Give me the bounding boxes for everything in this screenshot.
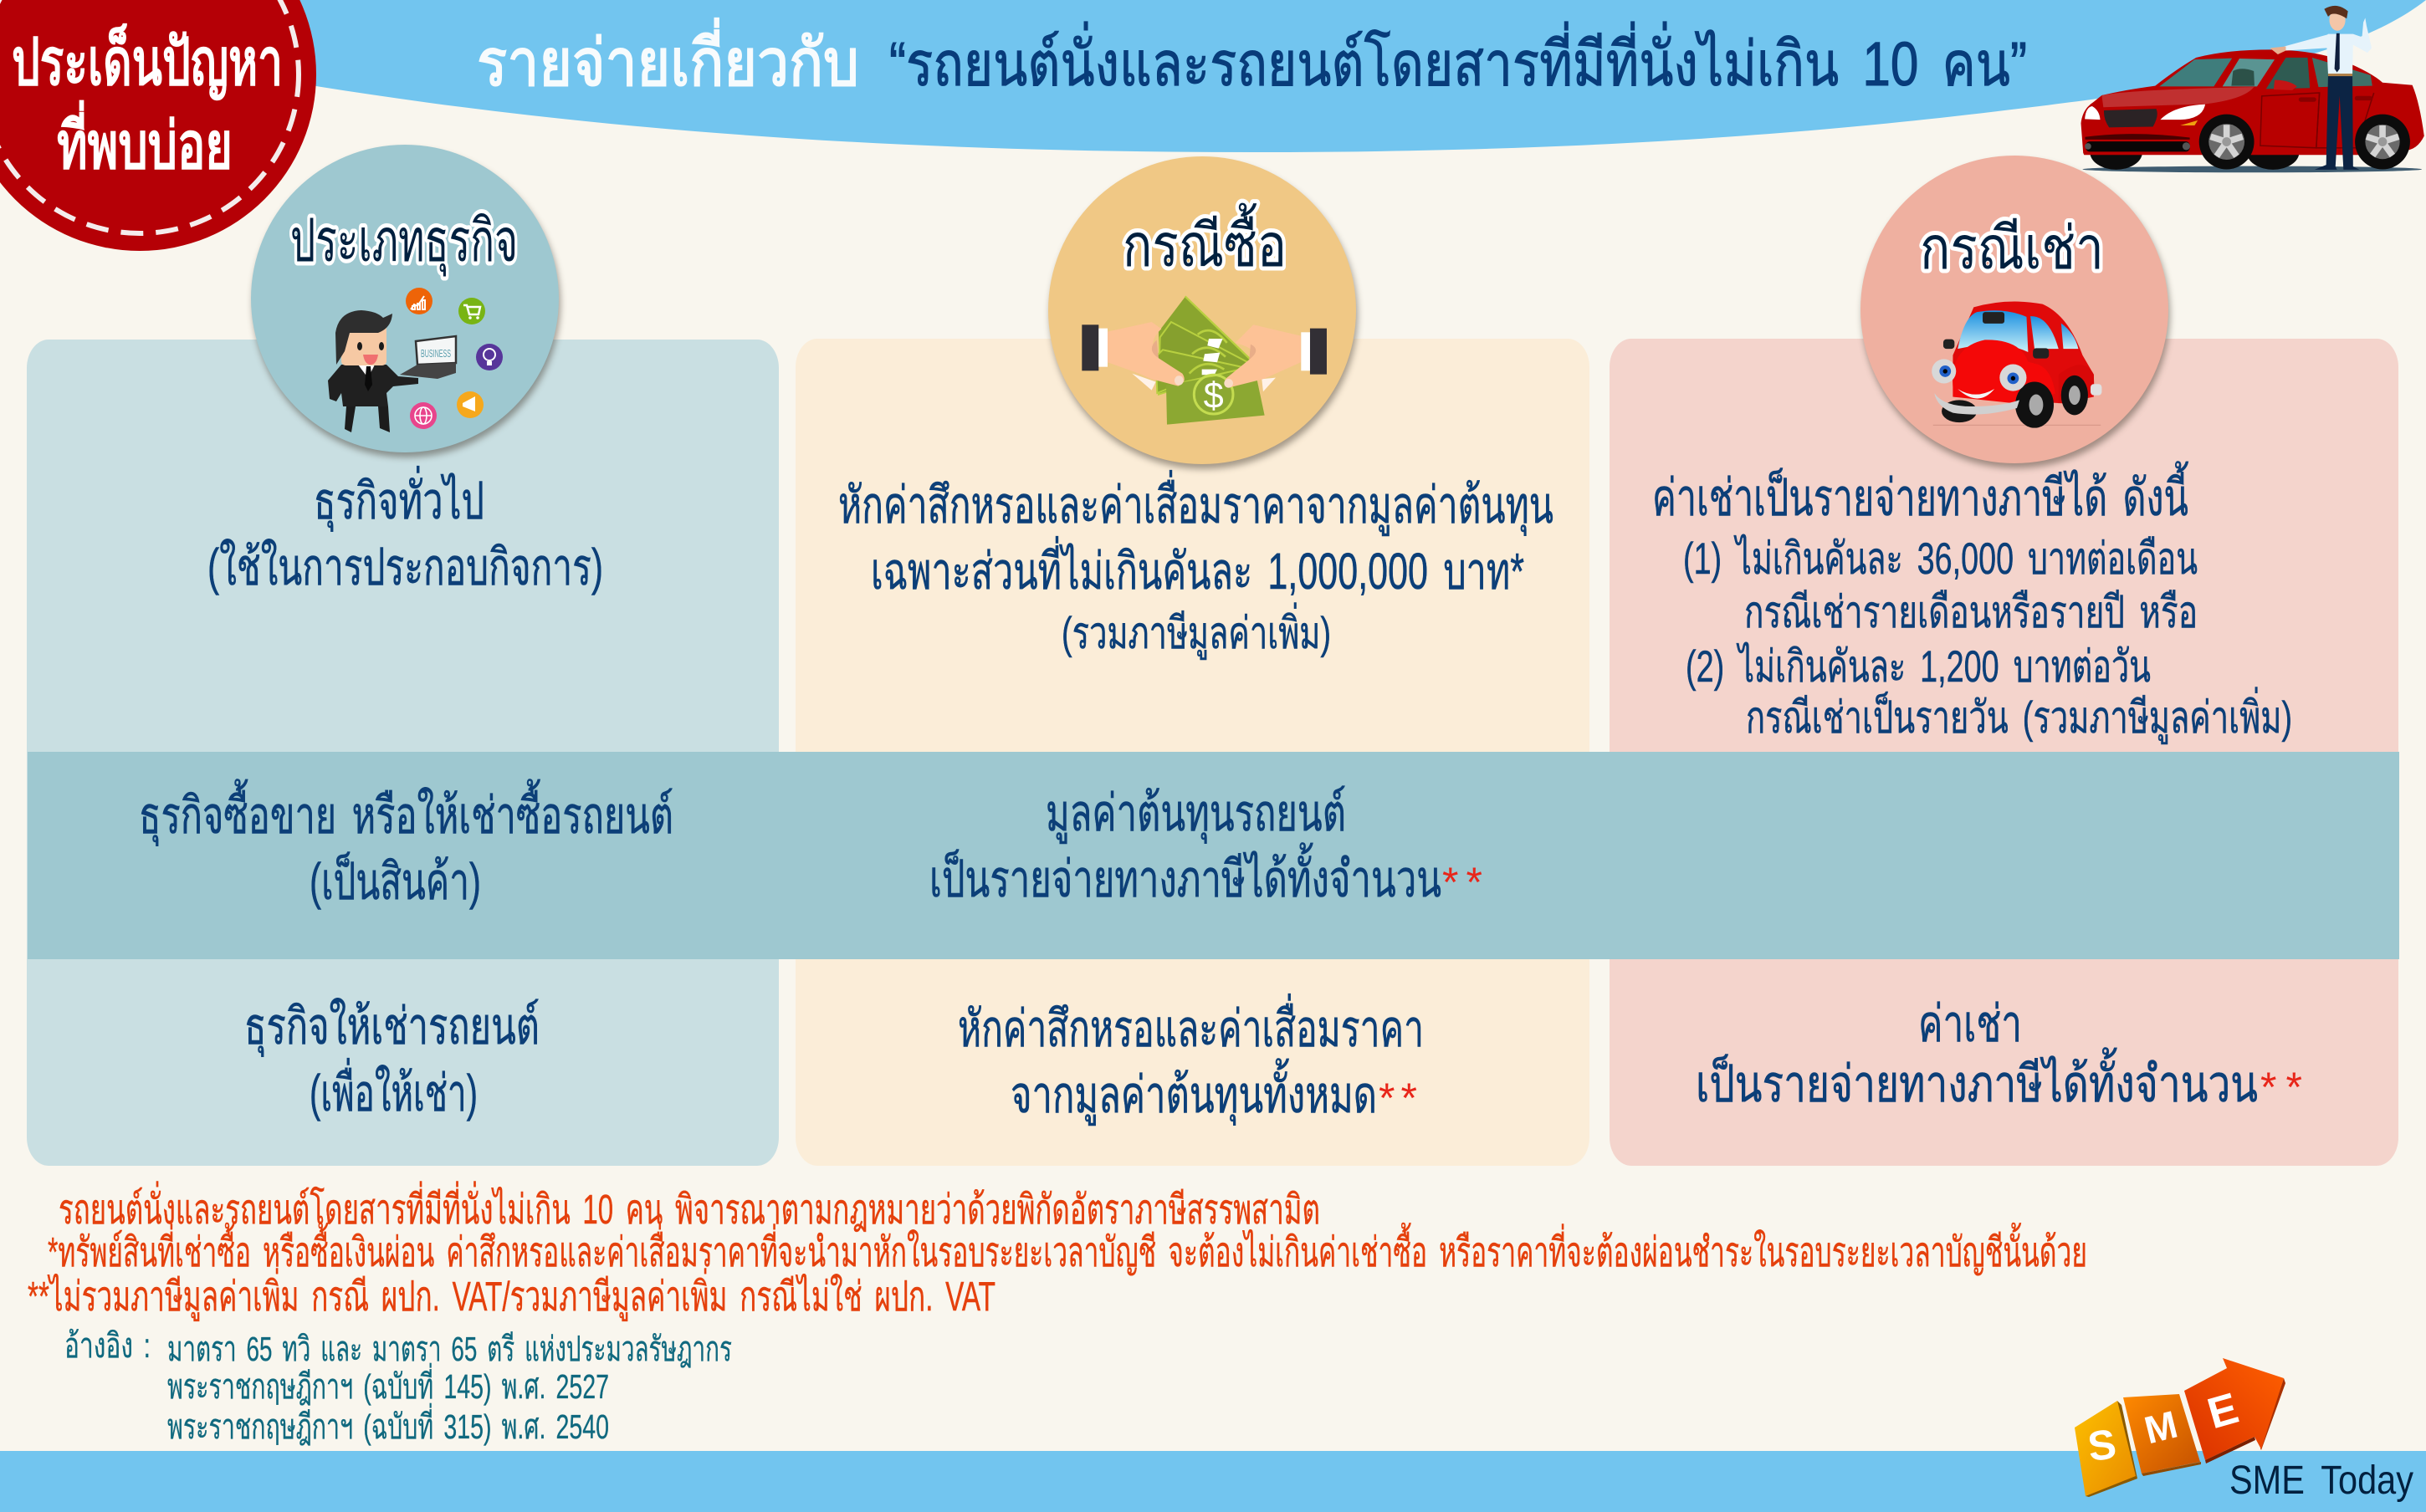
text: rental rule: ค่าเช่าเป็นรายจ่ายทางภาษีได้ ดังนี้ (1652, 461, 2188, 526)
heading: purchase: กรณีซื้อ (1123, 202, 1287, 279)
icon circle: purchase (1048, 156, 1356, 464)
text: rental business purchase rule: จากมูลค่าต้นทุนทั้งหมด (1011, 1058, 1377, 1126)
panel: purchase column (796, 339, 1589, 1166)
icon: businessman with laptop (328, 310, 456, 432)
text: rental business: (เพื่อให้เช่า) (310, 1058, 478, 1121)
title badge: ประเด็นปัญหา (12, 24, 283, 100)
text: purchase rule: หักค่าสึกหรอและค่าเสื่อมราคาจากมูลค่าต้นทุน (838, 470, 1553, 536)
references: พระราชกฤษฎีกาฯ (ฉบับที่ 145) พ.ศ. 2527 (167, 1363, 609, 1406)
text: rental business: ธุรกิจให้เช่ารถยนต์ (244, 998, 540, 1057)
title badge: ที่พบบ่อย (57, 101, 233, 182)
panel: rental column (1610, 339, 2398, 1166)
text: trading purchase rule: ** (1442, 859, 1482, 906)
icon: megaphone (457, 391, 484, 418)
icon: hands exchanging money: $ (1204, 375, 1224, 416)
main title: รายจ่ายเกี่ยวกับ (477, 18, 859, 100)
footnotes: รถยนต์นั่งและรถยนต์โดยสารที่มีที่นั่งไม่เกิน 10 คน พิจารณาตามกฎหมายว่าด้วยพิกัดอัตราภาษีสรรพสามิต (59, 1181, 1320, 1233)
text: trading purchase rule (929, 784, 1482, 907)
text: purchase rule (838, 470, 1553, 660)
icon: cart (458, 298, 485, 324)
icon circle: business type (251, 145, 559, 452)
icon: cartoon red car (1932, 302, 2101, 428)
heading: rental: กรณีเช่า (1920, 216, 2104, 282)
text: rental rule: (1) ไม่เกินคันละ 36,000 บาทต่อเดือน (1683, 534, 2198, 584)
text: rental business rent rule: ค่าเช่า (1918, 995, 2022, 1052)
footnotes: **ไม่รวมภาษีมูลค่าเพิ่ม กรณี ผปก. VAT/รวมภาษีมูลค่าเพิ่ม กรณีไม่ใช่ ผปก. VAT (28, 1268, 995, 1321)
panel: middle band (28, 752, 2399, 959)
icon: globe (410, 402, 437, 429)
text: rental business purchase rule (958, 994, 1424, 1126)
text: rental business rent rule: เป็นรายจ่ายทางภาษีได้ทั้งจำนวน (1696, 1047, 2258, 1112)
text: trading purchase rule: มูลค่าต้นทุนรถยนต์ (1046, 784, 1346, 844)
text: rental rule: (2) ไม่เกินคันละ 1,200 บาทต่อวัน (1686, 641, 2151, 692)
references: มาตรา 65 ทวิ และ มาตรา 65 ตรี แห่งประมวลรัษฎากร (167, 1330, 732, 1368)
references: อ้างอิง : (64, 1326, 151, 1365)
main title (477, 18, 2027, 100)
title badge (0, 0, 316, 251)
text: trading purchase rule: เป็นรายจ่ายทางภาษีได้ทั้งจำนวน (929, 842, 1441, 907)
bottom bar (0, 1451, 2426, 1512)
heading: business type: ประเภทธุรกิจ (290, 208, 518, 277)
text: rental business (244, 998, 540, 1121)
icon: hands exchanging money (1082, 296, 1327, 425)
text: business type rows, general business (207, 466, 603, 595)
header banner (251, 0, 2426, 152)
text: business type rows, general business: (ใช้ในการประกอบกิจการ) (207, 539, 603, 595)
icon: idea (476, 344, 503, 370)
text: trading business: (เป็นสินค้า) (310, 852, 481, 910)
text: business type rows, general business: ธุรกิจทั่วไป (314, 466, 484, 532)
text: rental rule (1652, 461, 2292, 744)
text: rental business purchase rule: หักค่าสึกหรอและค่าเสื่อมราคา (958, 994, 1424, 1057)
footnotes (28, 1181, 2087, 1321)
text: trading business: ธุรกิจซื้อขาย หรือให้เช่าซื้อรถยนต์ (139, 779, 673, 846)
text: rental rule: กรณีเช่ารายเดือนหรือรายปี หรือ (1744, 588, 2198, 637)
text: rental business rent rule: ** (2260, 1064, 2302, 1111)
text: purchase rule: เฉพาะส่วนที่ไม่เกินคันละ 1,000,000 บาท* (871, 536, 1524, 600)
logo: SME arrow: E (2203, 1384, 2244, 1438)
icon circle: rental (1860, 156, 2168, 463)
text: purchase rule: (รวมภาษีมูลค่าเพิ่ม) (1062, 602, 1331, 660)
logo: SME arrow: M (2140, 1402, 2182, 1452)
panel: business type column (27, 340, 779, 1166)
icon: chart (406, 288, 432, 314)
icon: businessman with laptop: BUSINESS (421, 347, 451, 360)
references (64, 1326, 732, 1446)
logo: SME arrow: S (2085, 1420, 2119, 1470)
illustration: man with red car (2081, 6, 2424, 172)
references: พระราชกฤษฎีกาฯ (ฉบับที่ 315) พ.ศ. 2540 (167, 1403, 609, 1446)
main title: “รถยนต์นั่งและรถยนต์โดยสารที่มีที่นั่งไม่เกิน 10 คน” (889, 21, 2027, 99)
text: rental business purchase rule: ** (1379, 1075, 1417, 1121)
text: trading business (139, 779, 673, 910)
text: rental business rent rule (1696, 995, 2302, 1112)
logo: SME arrow (2075, 1358, 2285, 1497)
